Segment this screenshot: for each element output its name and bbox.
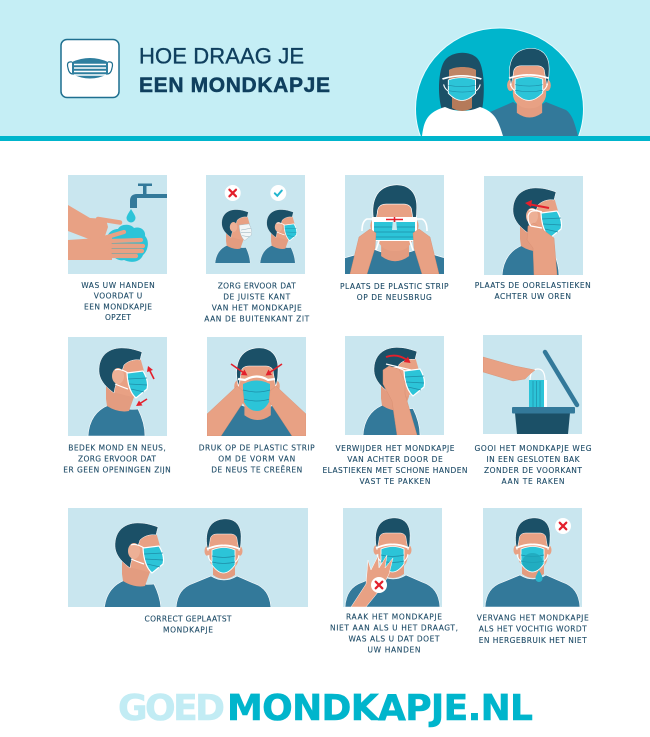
damp patch [522, 553, 542, 571]
caption 6: OM DE VORM VAN [218, 454, 295, 463]
caption 7: ELASTIEKEN MET SCHONE HANDEN [322, 466, 468, 475]
caption 4: ACHTER UW OREN [494, 292, 571, 301]
caption 10: RAAK HET MONDKAPJE [346, 613, 442, 622]
red arrow down [136, 399, 147, 406]
caption 8: AAN TE RAKEN [502, 477, 564, 486]
red strip marker [386, 217, 403, 222]
red arrow [386, 356, 410, 363]
footer brand: MONDKAPJE.NL [227, 688, 533, 729]
mask held flat [372, 217, 417, 241]
hands [350, 229, 439, 274]
caption 2: DE JUISTE KANT [223, 293, 291, 302]
caption 11 [477, 614, 589, 645]
caption 5: ER GEEN OPENINGEN ZIJN [63, 466, 171, 474]
caption 1: VOORDAT U [94, 292, 142, 301]
hand behind ear [527, 223, 557, 275]
caption 7 [322, 444, 468, 486]
hand touching mask [351, 555, 393, 607]
caption 2: AAN DE BUITENKANT ZIT [204, 315, 310, 324]
caption 7: VERWIJDER HET MONDKAPJE [336, 444, 455, 453]
hands [207, 386, 306, 436]
elastic [386, 364, 411, 370]
caption 4 [475, 281, 591, 301]
panel 7: remove mask from behind [345, 336, 444, 435]
icon: cross [225, 185, 241, 201]
title: EEN MONDKAPJE [139, 74, 330, 97]
correct: blue side out [260, 210, 297, 264]
panel 6: press plastic strip [207, 337, 306, 436]
caption 6: DRUK OP DE PLASTIC STRIP [199, 443, 315, 452]
caption 9 [144, 615, 232, 635]
caption 3: PLAATS DE PLASTIC STRIP [340, 282, 449, 291]
caption 7: VAN ACHTER DOOR DE [347, 455, 443, 464]
caption 1: OPZET [105, 313, 131, 322]
caption 8: ZONDER DE VOORKANT [484, 466, 582, 475]
title: HOE DRAAG JE [139, 44, 304, 68]
caption 8 [474, 444, 592, 486]
icon: tap [130, 184, 167, 208]
caption 9: CORRECT GEPLAATST [144, 615, 232, 624]
panel 3: plastic strip on nose bridge [345, 175, 444, 274]
caption 1 [81, 281, 155, 322]
caption 3: OP DE NEUSBRUG [357, 293, 432, 302]
caption 6: DE NEUS TE CREËREN [211, 465, 302, 474]
caption 9: MONDKAPJE [163, 626, 213, 635]
red arrow up [147, 366, 154, 379]
icon: cross [555, 518, 571, 534]
wrong: white side out [215, 210, 252, 264]
caption 11: ALS HET VOCHTIG WORDT [479, 625, 587, 634]
panel 5: cover mouth and nose [68, 337, 167, 436]
side view [104, 523, 164, 611]
ear loops [362, 219, 427, 250]
caption 1: WAS UW HANDEN [81, 281, 155, 290]
caption 5: BEDEK MOND EN NEUS, [68, 444, 166, 453]
panel 1: wash hands [68, 175, 167, 274]
mask [238, 376, 275, 411]
caption 11: EN HERGEBRUIK HET NIET [479, 636, 587, 645]
caption 10 [330, 613, 458, 655]
bin [512, 352, 577, 434]
caption 10: NIET AAN ALS U HET DRAAGT, [330, 624, 458, 633]
hand on elastic [383, 366, 417, 435]
panel 2: correct side of mask [206, 175, 305, 274]
panel 9: correctly placed mask [68, 508, 308, 607]
caption 8: IN EEN GESLOTEN BAK [486, 455, 581, 464]
panel 8: throw away in closed bin [483, 335, 582, 434]
icon: drop [536, 570, 542, 582]
front view [176, 519, 271, 608]
caption 3 [340, 282, 449, 302]
icon: water drop [126, 209, 136, 222]
icon: cross [371, 577, 387, 593]
used mask [529, 369, 547, 407]
title [139, 44, 330, 97]
icon: check [270, 185, 286, 201]
caption 4: PLAATS DE OORELASTIEKEN [475, 281, 591, 290]
hands [68, 205, 143, 260]
caption 5 [63, 444, 171, 474]
soap foam [107, 225, 148, 262]
caption 8: GOOI HET MONDKAPJE WEG [474, 444, 592, 453]
arm and hand [483, 357, 535, 381]
footer brand: GOED [118, 688, 225, 729]
caption 6 [199, 443, 315, 474]
caption 10: WAS ALS U DAT DOET [348, 635, 440, 644]
caption 1: EEN MONDKAPJE [84, 302, 152, 312]
panel 11: replace when damp [483, 508, 582, 607]
caption 2: ZORG ERVOOR DAT [218, 282, 296, 291]
panel 10: do not touch [343, 508, 442, 607]
red arrows [231, 364, 282, 376]
caption 5: ZORG ERVOOR DAT [78, 454, 156, 464]
caption 7: VAST TE PAKKEN [360, 477, 430, 486]
header illustration: two people with masks [415, 28, 584, 136]
red arrow [525, 200, 549, 208]
header band [0, 0, 650, 141]
caption 2 [204, 282, 310, 324]
elastic loop [528, 211, 542, 228]
caption 11: VERVANG HET MONDKAPJE [477, 614, 589, 623]
panel 4: ear elastics [484, 176, 583, 275]
caption 2: VAN HET MONDKAPJE [212, 304, 302, 313]
caption 10: UW HANDEN [368, 646, 420, 655]
icon: face mask [61, 40, 119, 98]
